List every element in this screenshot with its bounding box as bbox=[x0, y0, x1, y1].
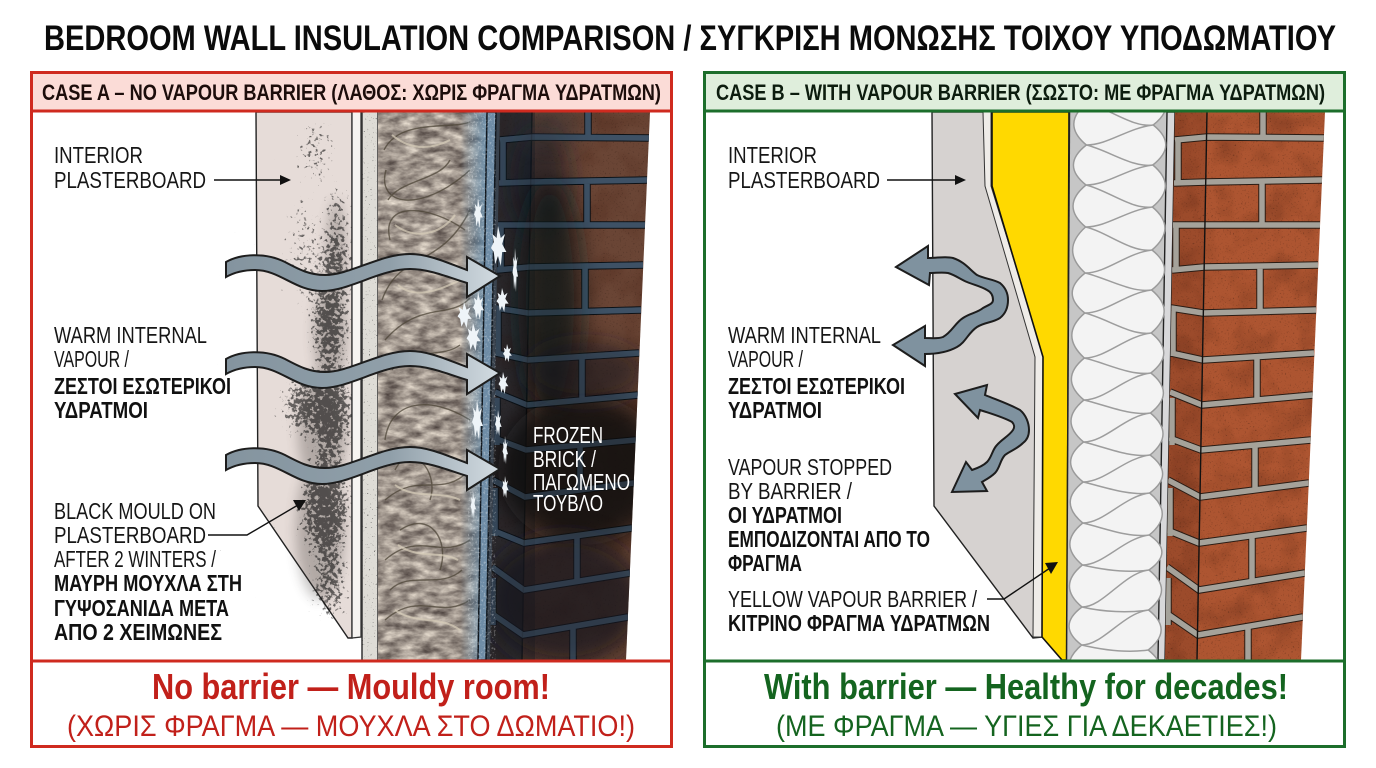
label: vapour stopped: ΦΡΑΓΜΑ bbox=[728, 550, 802, 576]
upper vapour arrow bouncing back bbox=[893, 246, 1008, 366]
panel: case A no vapour barrier bbox=[32, 72, 672, 746]
vapour arrows passing through wall bbox=[226, 254, 500, 490]
label: yellow vapour barrier bbox=[728, 586, 990, 636]
frost crystals bbox=[458, 198, 518, 519]
panel B background bbox=[704, 72, 1344, 746]
panel B footer bbox=[764, 666, 1288, 743]
label: frozen brick: ΤΟΥΒΛΟ bbox=[533, 490, 603, 516]
label: vapour stopped: ΟΙ ΥΔΡΑΤΜΟΙ bbox=[728, 502, 842, 528]
label: black mould: BLACK MOULD ON bbox=[54, 498, 216, 524]
arrow: to mould bbox=[208, 500, 306, 535]
metal frame strip with frost bbox=[468, 112, 496, 660]
mineral wool insulation bbox=[378, 112, 490, 660]
mouldy plasterboard bbox=[256, 112, 362, 638]
panel A header bbox=[33, 74, 670, 111]
label: yellow vapour barrier: ΚΙΤΡΙΝΟ ΦΡΑΓΜΑ ΥΔΡΑΤΜΩΝ bbox=[728, 610, 990, 636]
plasterboard B bbox=[932, 112, 1044, 638]
label: black mould: AFTER 2 WINTERS / bbox=[54, 546, 216, 572]
label: warm internal vapour B bbox=[728, 322, 905, 423]
label: black mould: ΑΠΟ 2 ΧΕΙΜΩΝΕΣ bbox=[54, 619, 222, 645]
label: warm internal vapour B: ΥΔΡΑΤΜΟΙ bbox=[728, 397, 822, 423]
label: warm internal vapour: ΖΕΣΤΟΙ ΕΣΩΤΕΡΙΚΟΙ bbox=[54, 373, 231, 399]
panel B frame bbox=[704, 72, 1344, 746]
label: vapour stopped: ΕΜΠΟΔΙΖΟΝΤΑΙ ΑΠΟ ΤΟ bbox=[728, 526, 930, 552]
white insulation batts bbox=[1068, 85, 1166, 690]
cavity and metal strip bbox=[1066, 112, 1175, 660]
wall cross-section B bbox=[891, 112, 1325, 660]
label: frozen brick: BRICK / bbox=[533, 446, 596, 472]
label: frozen brick: ΠΑΓΩΜΕΝΟ bbox=[533, 469, 630, 495]
panel: case B with vapour barrier bbox=[704, 72, 1344, 746]
label: yellow vapour barrier: YELLOW VAPOUR BARRIER / bbox=[728, 586, 977, 612]
panel A background bbox=[32, 72, 672, 746]
panel A footer: (ΧΩΡΙΣ ΦΡΑΓΜΑ — ΜΟΥΧΛΑ ΣΤΟ ΔΩΜΑΤΙΟ!) bbox=[67, 710, 635, 743]
insulation left edge line bbox=[1066, 112, 1070, 660]
label: vapour stopped: VAPOUR STOPPED bbox=[728, 454, 892, 480]
arrow: to plasterboard B bbox=[887, 175, 966, 185]
label: warm internal vapour B: VAPOUR / bbox=[728, 346, 803, 372]
panel B header bbox=[706, 74, 1343, 111]
arrow: to barrier bbox=[987, 562, 1058, 599]
label: warm internal vapour: ΥΔΡΑΤΜΟΙ bbox=[54, 397, 148, 423]
yellow vapour barrier bbox=[992, 112, 1069, 660]
labels panel B bbox=[728, 142, 1058, 636]
label: black mould: PLASTERBOARD bbox=[54, 522, 206, 548]
label: vapour stopped bbox=[728, 454, 930, 576]
panel B footer: With barrier — Healthy for decades! bbox=[764, 666, 1288, 707]
label: interior plasterboard B bbox=[728, 142, 880, 193]
label: frozen brick bbox=[533, 422, 630, 516]
label: black mould bbox=[54, 498, 242, 645]
label: warm internal vapour: VAPOUR / bbox=[54, 346, 129, 372]
label: black mould: ΓΥΨΟΣΑΝΙΔΑ ΜΕΤΑ bbox=[54, 595, 229, 621]
concrete band bbox=[362, 112, 379, 660]
label: black mould: ΜΑΥΡΗ ΜΟΥΧΛΑ ΣΤΗ bbox=[54, 570, 242, 596]
label: warm internal vapour bbox=[54, 322, 231, 423]
label: warm internal vapour B: ΖΕΣΤΟΙ ΕΣΩΤΕΡΙΚΟΙ bbox=[728, 373, 905, 399]
panel A header: CASE A – NO VAPOUR BARRIER (ΛΑΘΟΣ: ΧΩΡΙΣ ΦΡΑΓΜΑ ΥΔΡΑΤΜΩΝ) bbox=[42, 80, 661, 105]
label: interior plasterboard: PLASTERBOARD bbox=[54, 167, 206, 193]
wall cross-section A bbox=[226, 103, 668, 665]
panel A frame bbox=[32, 72, 672, 746]
label: warm internal vapour B: WARM INTERNAL bbox=[728, 322, 881, 348]
label: frozen brick: FROZEN bbox=[533, 422, 603, 448]
arrow: to plasterboard bbox=[214, 175, 291, 185]
panel A footer bbox=[67, 666, 635, 743]
label: interior plasterboard: INTERIOR bbox=[54, 142, 143, 168]
label: warm internal vapour: WARM INTERNAL bbox=[54, 322, 207, 348]
label: interior plasterboard B: PLASTERBOARD bbox=[728, 167, 880, 193]
label: interior plasterboard bbox=[54, 142, 206, 193]
panel B footer: (ΜΕ ΦΡΑΓΜΑ — ΥΓΙΕΣ ΓΙΑ ΔΕΚΑΕΤΙΕΣ!) bbox=[776, 710, 1277, 743]
cold brick wall bbox=[486, 112, 650, 660]
panel A footer: No barrier — Mouldy room! bbox=[152, 666, 550, 707]
lower vapour arrow bouncing back bbox=[952, 385, 1029, 492]
label: vapour stopped: BY BARRIER / bbox=[728, 478, 852, 504]
label: interior plasterboard B: INTERIOR bbox=[728, 142, 817, 168]
red brick wall bbox=[1165, 112, 1330, 660]
labels panel A bbox=[54, 142, 630, 645]
